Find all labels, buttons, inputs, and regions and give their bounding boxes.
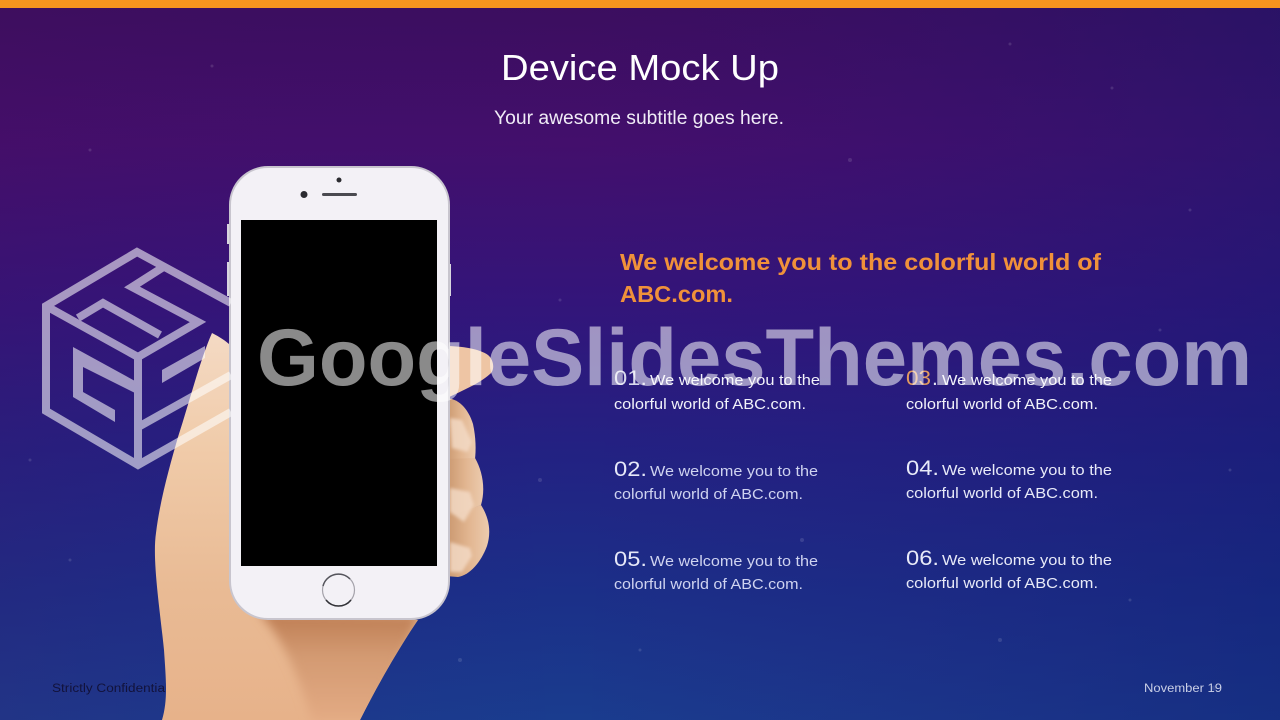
list item 01 xyxy=(614,367,820,413)
palm shadow under phone xyxy=(258,612,420,720)
list item 05: 05. xyxy=(614,548,647,571)
list item 04: 04. xyxy=(906,457,939,480)
home button xyxy=(322,574,354,606)
list item 04: We welcome you to the xyxy=(942,462,1112,479)
side buttons xyxy=(227,224,451,296)
ring finger xyxy=(445,458,483,520)
list item 06: colorful world of ABC.com. xyxy=(906,575,1098,592)
little finger xyxy=(445,505,489,577)
list item 02: We welcome you to the xyxy=(650,463,818,480)
list item 05 xyxy=(614,548,818,593)
list item 03: 03 xyxy=(906,367,931,390)
hand xyxy=(155,333,493,720)
list item 03: We welcome you to the xyxy=(942,372,1112,389)
list item 06: We welcome you to the xyxy=(942,552,1112,569)
list item 01: colorful world of ABC.com. xyxy=(614,396,806,413)
middle finger xyxy=(445,398,476,462)
phone screen xyxy=(241,220,437,566)
list item 01: 01. xyxy=(614,367,647,390)
heading: welcome message xyxy=(620,249,1101,307)
speaker xyxy=(322,193,357,196)
phone body xyxy=(230,167,449,619)
fingernails xyxy=(450,418,474,572)
list item 04: colorful world of ABC.com. xyxy=(906,485,1098,502)
list item 04 xyxy=(906,457,1112,502)
watermark: site name: GoogleSlidesThemes.com xyxy=(257,313,1252,403)
index finger xyxy=(445,346,493,399)
palm and wrist xyxy=(155,333,418,720)
title: Device Mock Up xyxy=(501,47,779,88)
illustration: hand holding phone xyxy=(155,167,493,720)
list item 03 xyxy=(906,367,1112,413)
list item 02 xyxy=(614,458,818,503)
front camera xyxy=(300,191,308,198)
heading: welcome message: We welcome you to the colorful world of xyxy=(620,249,1101,275)
phone xyxy=(230,167,449,619)
list item 06: 06. xyxy=(906,547,939,570)
list item 01: We welcome you to the xyxy=(650,372,820,389)
subtitle: Your awesome subtitle goes here. xyxy=(494,108,784,129)
list item 03: . xyxy=(932,367,938,390)
watermark: cube logo xyxy=(46,252,231,465)
heading: welcome message: ABC.com. xyxy=(620,281,733,307)
top accent bar xyxy=(0,0,1280,8)
list item 05: colorful world of ABC.com. xyxy=(614,576,803,593)
footer: confidentiality note: Strictly Confidential xyxy=(52,683,168,695)
list item 02: 02. xyxy=(614,458,647,481)
list item 06 xyxy=(906,547,1112,592)
list item 03: colorful world of ABC.com. xyxy=(906,396,1098,413)
sensor dot xyxy=(336,178,342,182)
list item 02: colorful world of ABC.com. xyxy=(614,486,803,503)
list item 05: We welcome you to the xyxy=(650,553,818,570)
footer: date: November 19 xyxy=(1144,683,1222,695)
